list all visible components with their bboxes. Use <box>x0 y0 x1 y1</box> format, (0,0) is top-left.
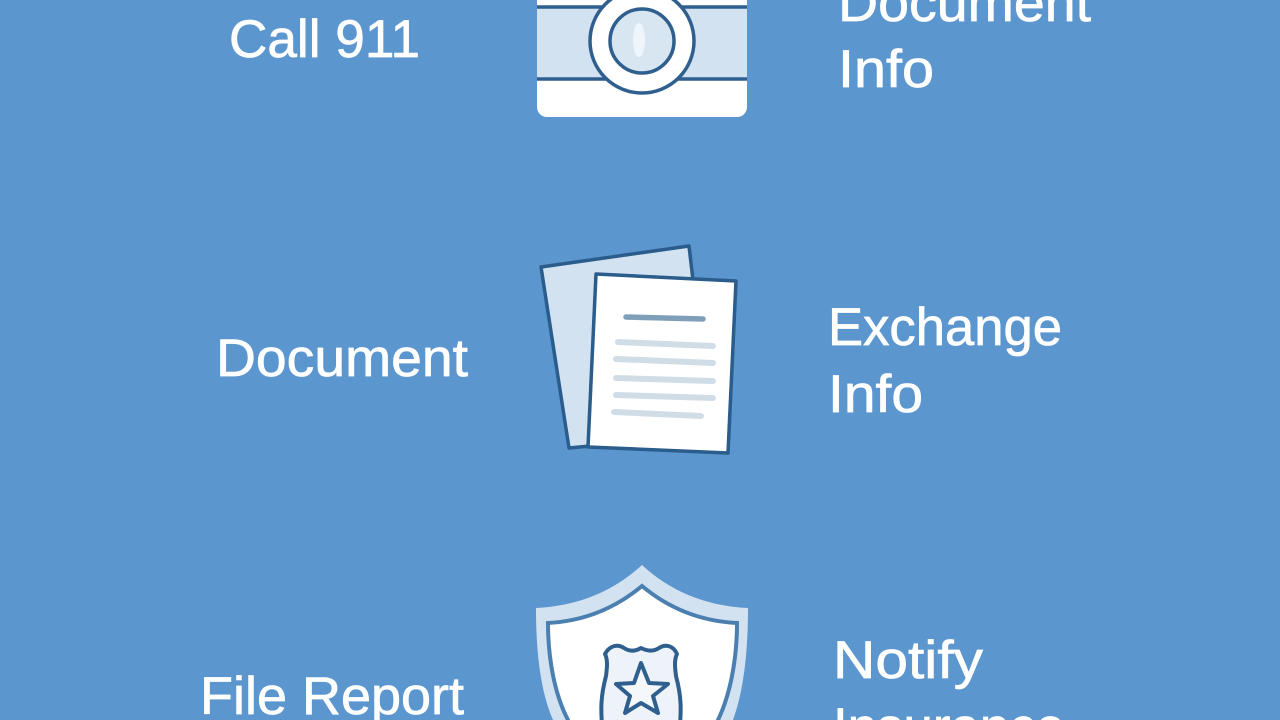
label: Notify Insurance <box>833 631 1065 720</box>
label: Document: Document <box>216 329 468 388</box>
label: Notify Insurance: Notify <box>833 631 984 690</box>
icon: camera <box>537 0 747 117</box>
label: Document Info <box>838 0 1091 99</box>
label: Exchange Info: Info <box>828 365 923 424</box>
icon: documents <box>541 246 736 453</box>
label: Document Info: Info <box>838 40 934 99</box>
label: Call 911: Call 911 <box>229 10 420 69</box>
label: Exchange Info: Exchange <box>828 298 1062 357</box>
label: Exchange Info <box>828 298 1062 424</box>
icon: police shield <box>536 565 748 720</box>
